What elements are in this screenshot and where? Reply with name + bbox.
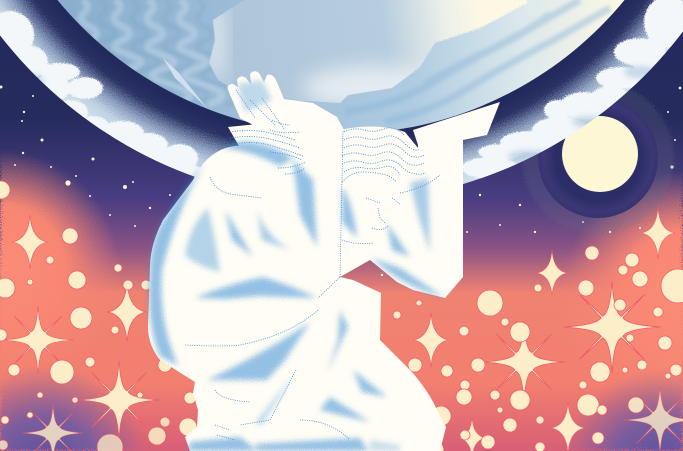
moon with dark halo <box>522 82 674 234</box>
dotted contour lines <box>185 90 440 440</box>
spark stars <box>2 207 683 451</box>
scalloped cloud layers left <box>81 0 222 105</box>
planet <box>58 0 624 130</box>
central landmass patch <box>209 0 527 103</box>
darker scallop bands left <box>150 2 233 104</box>
planet atmosphere ring <box>0 0 683 184</box>
scallop bands right <box>345 0 610 122</box>
right arm supporting the planet <box>413 102 500 200</box>
light streak <box>163 58 207 108</box>
small stars <box>0 86 681 276</box>
head and hair <box>340 126 463 298</box>
right cloud band <box>462 0 683 179</box>
bubbles <box>0 181 683 451</box>
patch highlight <box>209 8 422 103</box>
raised left arm and hand <box>228 71 344 295</box>
blue stipple shading <box>149 80 445 451</box>
body silhouette <box>148 128 446 451</box>
hair strands <box>230 128 426 182</box>
hair behind shoulder <box>228 124 298 172</box>
atmosphere clouds <box>0 0 683 192</box>
figure <box>148 71 500 451</box>
cloud shadows <box>32 62 654 163</box>
left cloud band <box>0 10 200 176</box>
